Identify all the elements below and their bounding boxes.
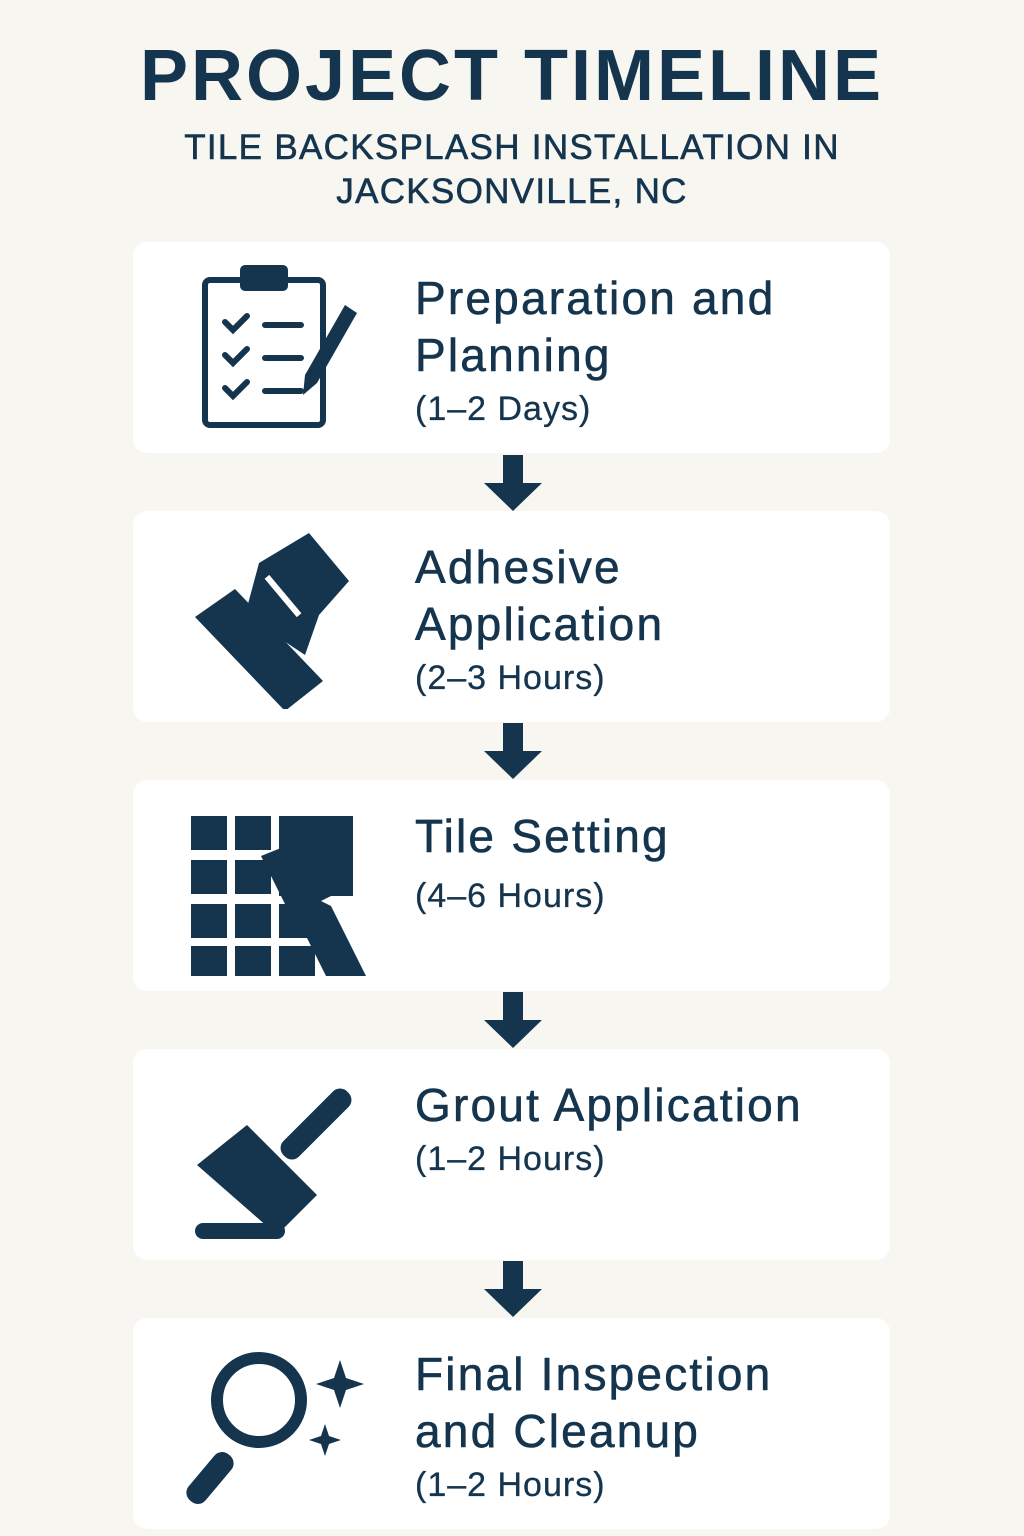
text: step 3: (4–6 Hours) [415, 877, 606, 915]
text: step 4 [415, 1079, 803, 1178]
text: step 5 [415, 1348, 772, 1504]
card: tile setting [133, 780, 890, 991]
card: final inspection [133, 1318, 890, 1529]
text: step 1: (1–2 Days) [415, 390, 591, 428]
arrow 1 [484, 455, 542, 511]
text: step 2 [414, 541, 664, 697]
text: step 5: and Cleanup [415, 1405, 700, 1457]
title: PROJECT TIMELINE [140, 36, 884, 116]
text: step 5: Final Inspection [415, 1348, 772, 1400]
text: step 4: (1–2 Hours) [415, 1140, 606, 1178]
subtitle [184, 128, 840, 211]
card: adhesive application [133, 511, 890, 722]
arrow 2 [484, 723, 542, 779]
text: step 1: Planning [415, 329, 612, 381]
card: grout application [133, 1049, 890, 1260]
icon: tiles [191, 816, 366, 976]
text: step 3 [415, 810, 670, 915]
text: step 2: Adhesive [415, 541, 622, 593]
text: step 2: Application [415, 598, 664, 650]
arrow 3 [484, 992, 542, 1048]
card: preparation and planning [133, 242, 890, 453]
text: step 5: (1–2 Hours) [415, 1466, 606, 1504]
icon: clipboard [202, 265, 357, 428]
icon: trowel [195, 533, 349, 709]
text: step 2: (2–3 Hours) [415, 659, 606, 697]
text: step 1 [415, 272, 775, 428]
text: step 4: Grout Application [415, 1079, 803, 1131]
arrow 4 [484, 1261, 542, 1317]
icon: magnifier [186, 1352, 364, 1504]
subtitle: TILE BACKSPLASH INSTALLATION IN [184, 128, 840, 167]
text: step 1: Preparation and [415, 272, 775, 324]
subtitle: JACKSONVILLE, NC [336, 172, 688, 211]
text: step 3: Tile Setting [415, 810, 670, 862]
icon: grout float [195, 1088, 352, 1239]
